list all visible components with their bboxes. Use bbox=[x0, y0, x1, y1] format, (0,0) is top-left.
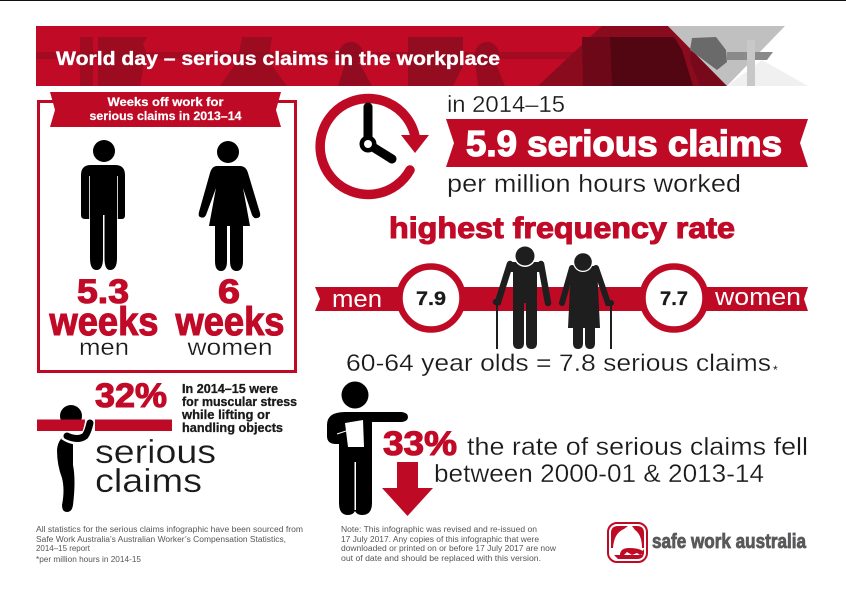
icon: worker head bbox=[60, 405, 82, 427]
text: in 2014-15: in 2014–15 bbox=[447, 91, 565, 117]
text: rate fell: the rate of serious claims fell bbox=[467, 433, 808, 461]
stat: 33%: 33% bbox=[383, 425, 457, 463]
icon: elderly man with cane bbox=[496, 245, 548, 349]
footnote: revision note: Note: This infographic was revised and re-issued on bbox=[341, 525, 537, 534]
icon: woman bbox=[199, 141, 260, 271]
text: 60-64 year olds: * bbox=[773, 363, 778, 377]
heading: highest frequency rate: highest frequency rate bbox=[389, 212, 735, 245]
frequency band bbox=[315, 266, 808, 330]
footnote: sources: *per million hours in 2014-15 bbox=[36, 555, 142, 564]
women weeks stat: women bbox=[186, 334, 272, 360]
footnote: sources: All statistics for the serious claims infographic have been sourced from bbox=[36, 525, 303, 534]
men weeks stat: men bbox=[79, 334, 129, 360]
text: per million hours worked: per million hours worked bbox=[447, 170, 741, 198]
banner title: World day – serious claims in the workplace bbox=[56, 49, 500, 70]
footnote: sources: 2014–15 report bbox=[36, 544, 91, 553]
logo: safe work australia: safe work australia bbox=[652, 531, 807, 553]
icon: clock with arrow bbox=[320, 98, 429, 194]
ribbon heading: Weeks off work for bbox=[108, 97, 224, 109]
circle: women rate 7.7 bbox=[642, 266, 706, 330]
icon: man bbox=[81, 140, 125, 270]
logo: safe work australia bbox=[608, 523, 807, 562]
circle: men rate 7.9: 7.9 bbox=[416, 289, 446, 310]
footnote: sources bbox=[36, 525, 303, 564]
men weeks stat: 5.3 bbox=[77, 273, 129, 311]
women weeks stat bbox=[175, 273, 284, 360]
header banner bbox=[36, 26, 808, 86]
text: muscular stress: while lifting or bbox=[181, 408, 270, 422]
text: muscular stress: for muscular stress bbox=[182, 395, 297, 409]
footnote: revision note: out of date and should be replaced with this version. bbox=[341, 554, 541, 563]
label: women: women bbox=[714, 284, 801, 311]
text: rate fell: between 2000-01 & 2013-14 bbox=[434, 460, 764, 488]
ribbon heading: serious claims in 2013–14 bbox=[90, 111, 242, 123]
ribbon: 5.9 serious claims: 5.9 serious claims bbox=[466, 123, 782, 164]
footnote: revision note: downloaded or printed on or before 17 July 2017 are now bbox=[341, 544, 556, 553]
footnote: revision note bbox=[341, 525, 556, 563]
text: muscular stress bbox=[181, 382, 297, 435]
text: rate fell bbox=[434, 433, 808, 488]
panel: weeks off work bbox=[38, 92, 296, 372]
icon: worker carrying bar bbox=[57, 422, 90, 512]
label: men: men bbox=[332, 286, 382, 313]
text: muscular stress: In 2014–15 were bbox=[182, 382, 278, 396]
text: serious claims: serious bbox=[95, 433, 216, 470]
ribbon heading bbox=[50, 92, 281, 127]
men weeks stat: weeks bbox=[49, 300, 158, 344]
icon: presenter pointing bbox=[327, 382, 408, 515]
text: serious claims bbox=[95, 433, 216, 499]
men weeks stat bbox=[49, 273, 158, 360]
red bar bbox=[37, 420, 172, 431]
women weeks stat: 6 bbox=[218, 273, 240, 311]
circle: women rate 7.7: 7.7 bbox=[660, 289, 688, 310]
text: muscular stress: handling objects bbox=[182, 421, 283, 435]
footnote: sources: Safe Work Australia’s Australian Worker’s Compensation Statistics, bbox=[36, 535, 286, 544]
footnote: revision note: 17 July 2017. Any copies of this infographic that were bbox=[341, 535, 540, 544]
text: serious claims: claims bbox=[95, 462, 202, 499]
stat: 32%: 32% bbox=[95, 377, 167, 415]
text: 60-64 year olds: 60-64 year olds = 7.8 serious claims bbox=[346, 350, 771, 377]
women weeks stat: weeks bbox=[175, 300, 284, 344]
arrow: down bbox=[382, 462, 433, 516]
icon: elderly woman with cane bbox=[562, 252, 612, 349]
circle: men rate 7.9 bbox=[400, 266, 462, 330]
